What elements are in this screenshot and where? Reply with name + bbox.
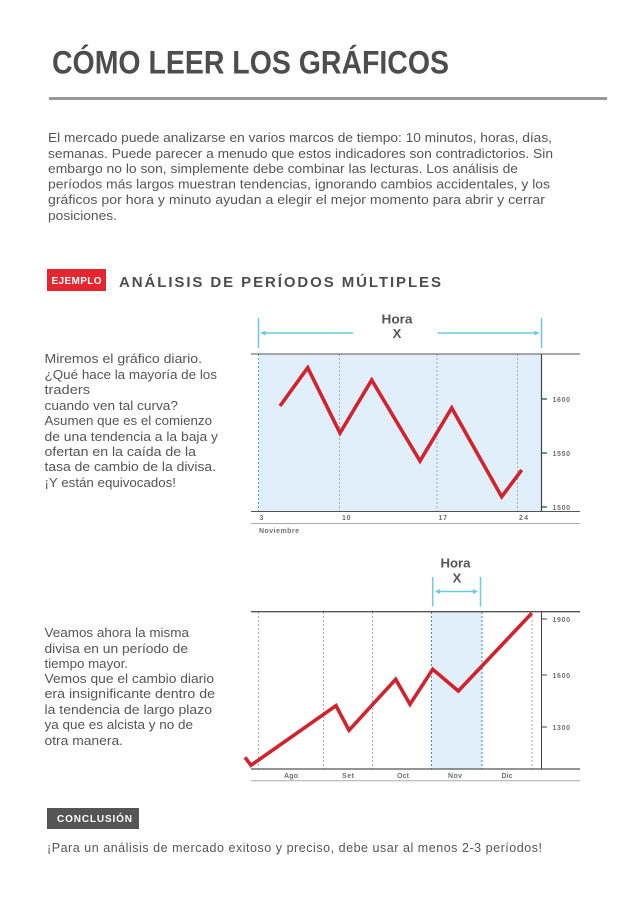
axis labels: Dic: [502, 773, 513, 780]
text: daily chart explanation: ofertan en la caída de la: [44, 444, 197, 459]
axis labels: 1600: [552, 397, 570, 404]
axis labels: 1600: [552, 673, 570, 680]
axis labels: Noviembre: [259, 528, 299, 535]
axis labels: 3: [260, 515, 264, 522]
text: daily chart explanation: Miremos el gráfico diario.: [44, 351, 202, 366]
axis labels: Set: [342, 773, 355, 780]
text: daily chart explanation: traders: [44, 382, 90, 397]
intro text: [48, 130, 553, 223]
badge: ejemplo: [47, 269, 106, 291]
axis labels: 1300: [552, 725, 570, 732]
text: daily chart explanation: [44, 351, 219, 490]
data line: [245, 613, 532, 765]
label: hora x top: Hora: [382, 311, 413, 326]
intro text: El mercado puede analizarse en varios marcos de tiempo: 10 minutos, horas, días,: [48, 130, 552, 145]
text: longer period explanation: Veamos ahora la misma: [44, 625, 190, 640]
label: hora x bottom: [440, 556, 471, 586]
axis labels: 1550: [552, 451, 570, 458]
axis labels: [284, 617, 570, 780]
intro text: gráficos por hora y minuto ayudan a elegir el mejor momento para abrir y cerrar: [48, 192, 546, 207]
text: longer period explanation: Vemos que el cambio diario: [44, 671, 214, 686]
text: longer period explanation: ya que es alcista y no de: [44, 717, 193, 732]
axis labels: [259, 397, 570, 535]
badge: ejemplo: EJEMPLO: [52, 276, 102, 287]
axis labels: 1500: [552, 505, 570, 512]
badge: conclusion: [47, 808, 139, 829]
label: hora x bottom: Hora: [440, 556, 471, 570]
text: daily chart explanation: tasa de cambio de la divisa.: [44, 459, 216, 474]
conclusion text: ¡Para un análisis de mercado exitoso y preciso, debe usar al menos 2-3 períodos!: [47, 841, 542, 855]
intro text: embargo no lo son, simplemente debe combinar las lecturas. Los análisis de: [48, 161, 518, 176]
section heading: ANÁLISIS DE PERÍODOS MÚLTIPLES: [119, 273, 441, 291]
label: hora x top: X: [393, 326, 402, 341]
axis labels: Nov: [448, 773, 462, 780]
highlighted period: [432, 612, 482, 769]
text: daily chart explanation: de una tendencia a la baja y: [44, 429, 219, 444]
chart: long term: [245, 556, 580, 781]
axis: [542, 354, 547, 512]
text: longer period explanation: tiempo mayor.: [44, 656, 128, 671]
text: longer period explanation: otra manera.: [44, 733, 123, 748]
text: longer period explanation: era insignificante dentro de: [44, 686, 215, 701]
axis labels: 24: [519, 515, 528, 522]
text: daily chart explanation: cuando ven tal curva?: [44, 398, 178, 413]
arrow: short span: [433, 577, 480, 606]
grid lines: [258, 354, 518, 511]
axis labels: 10: [342, 515, 351, 522]
intro text: semanas. Puede parecer a menudo que estos indicadores son contradictorios. Sin: [48, 146, 553, 161]
chart: daily: [251, 311, 580, 535]
axis labels: Oct: [397, 773, 410, 780]
text: longer period explanation: divisa en un período de: [44, 641, 188, 656]
axis labels: 17: [438, 515, 447, 522]
text: daily chart explanation: Asumen que es el comienzo: [44, 413, 212, 428]
intro text: posiciones.: [48, 208, 117, 223]
intro text: períodos más largos muestran tendencias, ignorando cambios accidentales, y los: [48, 176, 550, 192]
title: CÓMO LEER LOS GRÁFICOS: [52, 44, 449, 80]
axis labels: Ago: [284, 773, 298, 780]
label: hora x top: [382, 311, 413, 341]
label: hora x bottom: X: [453, 571, 462, 586]
badge: conclusion: CONCLUSIÓN: [57, 812, 132, 825]
axis labels: 1900: [552, 617, 570, 624]
arrow: time span: [258, 318, 542, 348]
text: daily chart explanation: ¡Y están equivocados!: [44, 475, 176, 490]
grid lines: [258, 612, 532, 769]
axis: [542, 612, 547, 769]
highlighted area: [258, 354, 542, 512]
text: longer period explanation: la tendencia de largo plazo: [44, 702, 212, 717]
text: daily chart explanation: ¿Qué hace la mayoría de los: [44, 367, 217, 382]
data line: [280, 368, 522, 497]
text: longer period explanation: [44, 625, 215, 748]
